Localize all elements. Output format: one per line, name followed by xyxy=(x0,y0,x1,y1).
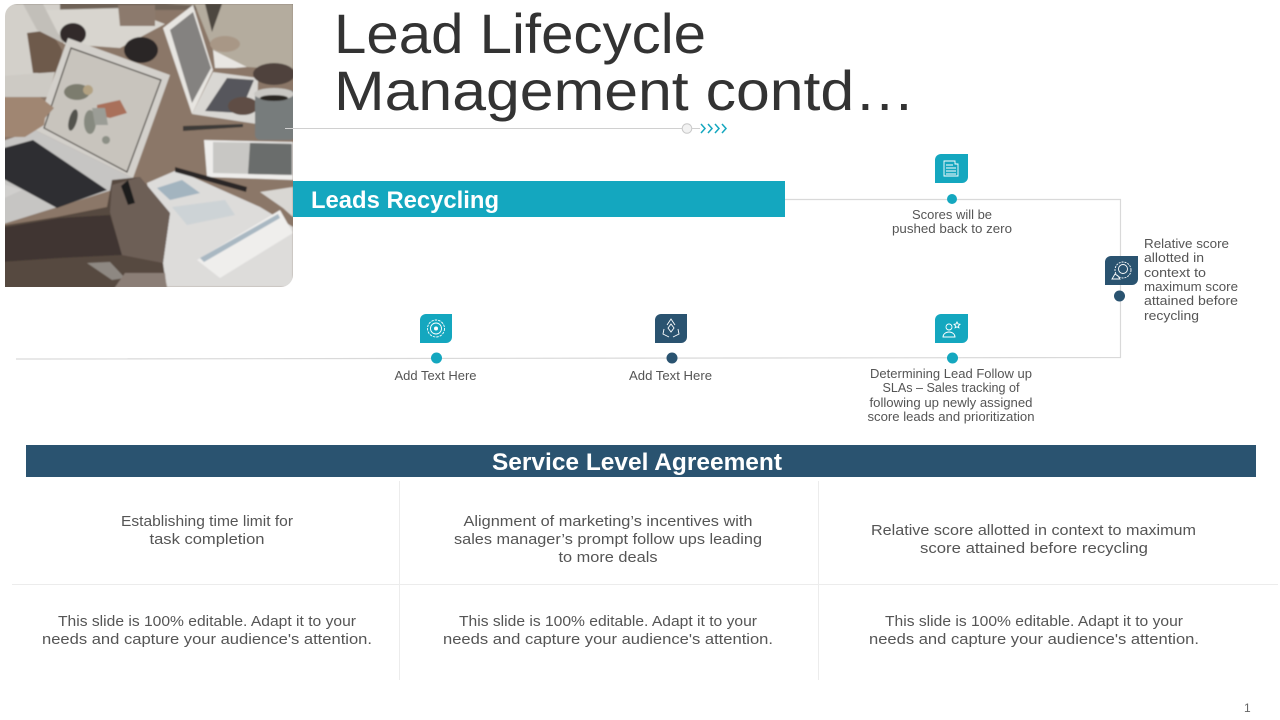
table grid lines xyxy=(12,481,1278,680)
icon: person with star xyxy=(935,314,968,343)
table cell: editable text 3 xyxy=(869,614,1199,648)
step: determining lead follow up: following up newly assigned xyxy=(870,396,1033,410)
step: add text here 1: Add Text Here xyxy=(394,369,477,383)
heading bar: Leads Recycling xyxy=(293,181,785,217)
heading bar: Service Level Agreement: Service Level Agreement xyxy=(492,449,782,476)
table cell: marketing incentives: sales manager’s prompt follow ups leading xyxy=(454,532,762,548)
pen xyxy=(183,124,243,131)
heading bar: Leads Recycling: Leads Recycling xyxy=(311,187,499,214)
table cell: editable text 1: needs and capture your audience's attention. xyxy=(42,632,372,648)
table cell: editable text 2 xyxy=(443,614,773,648)
main laptop base xyxy=(0,130,133,225)
icon: gear xyxy=(420,314,452,343)
table cell: editable text 1: This slide is 100% editable. Adapt it to your xyxy=(58,614,356,630)
table cell: time limit xyxy=(121,514,293,548)
step: determining lead follow up: score leads and prioritization xyxy=(868,410,1035,424)
mug xyxy=(254,96,293,140)
table cell: time limit: Establishing time limit for xyxy=(121,514,293,530)
page number: 1 xyxy=(1244,701,1251,715)
step: add text here 2 xyxy=(629,314,712,383)
step: relative score xyxy=(1105,237,1238,323)
table cell: marketing incentives: to more deals xyxy=(558,550,658,566)
table cell: editable text 2: This slide is 100% editable. Adapt it to your xyxy=(459,614,757,630)
tablet xyxy=(204,140,293,180)
icon: recycle xyxy=(655,314,687,343)
table cell: marketing incentives xyxy=(454,514,762,566)
table cell: marketing incentives: Alignment of marketing’s incentives with xyxy=(464,514,752,530)
step: relative score: attained before xyxy=(1144,294,1238,308)
table cell: time limit: task completion xyxy=(150,532,264,548)
step: determining lead follow up: SLAs – Sales tracking of xyxy=(882,381,1020,395)
world map xyxy=(64,84,90,100)
process flow connector line xyxy=(16,200,1120,359)
step: relative score: recycling xyxy=(1144,309,1199,323)
table cell: relative score xyxy=(871,523,1196,557)
step: scores pushed back to zero xyxy=(892,154,1012,236)
table cell: editable text 1 xyxy=(42,614,372,648)
title underline with arrows xyxy=(285,124,726,133)
table cell: editable text 3: needs and capture your audience's attention. xyxy=(869,632,1199,648)
lower arms and hands xyxy=(0,177,170,292)
step: determining lead follow up xyxy=(868,314,1035,424)
step: determining lead follow up: Determining Lead Follow up xyxy=(870,367,1032,381)
heading bar: Service Level Agreement xyxy=(26,445,1256,477)
step: scores pushed back to zero: pushed back to zero xyxy=(892,222,1012,236)
step: relative score: Relative score xyxy=(1144,237,1229,251)
title: Management contd… xyxy=(334,59,915,122)
step: relative score: maximum score xyxy=(1144,280,1238,294)
papers xyxy=(147,170,293,287)
table cell: relative score: score attained before recycling xyxy=(920,541,1148,557)
second laptop xyxy=(163,5,213,114)
step: scores pushed back to zero: Scores will be xyxy=(912,208,992,222)
icon: score document xyxy=(935,154,968,183)
table cell: relative score: Relative score allotted in context to maximum xyxy=(871,523,1196,539)
step: add text here 1 xyxy=(394,314,477,383)
step: relative score: context to xyxy=(1144,266,1206,280)
table cell: editable text 3: This slide is 100% editable. Adapt it to your xyxy=(885,614,1183,630)
photo: team at laptops xyxy=(0,0,300,292)
main laptop screen xyxy=(35,38,170,178)
dark stylus xyxy=(175,167,247,192)
background table and papers xyxy=(59,4,293,10)
step: add text here 2: Add Text Here xyxy=(629,369,712,383)
icon: gear with person xyxy=(1105,256,1138,285)
left hand xyxy=(0,97,54,137)
table cell: editable text 2: needs and capture your audience's attention. xyxy=(443,632,773,648)
title xyxy=(334,2,915,122)
step: relative score: allotted in xyxy=(1144,251,1204,265)
title: Lead Lifecycle xyxy=(334,2,706,65)
